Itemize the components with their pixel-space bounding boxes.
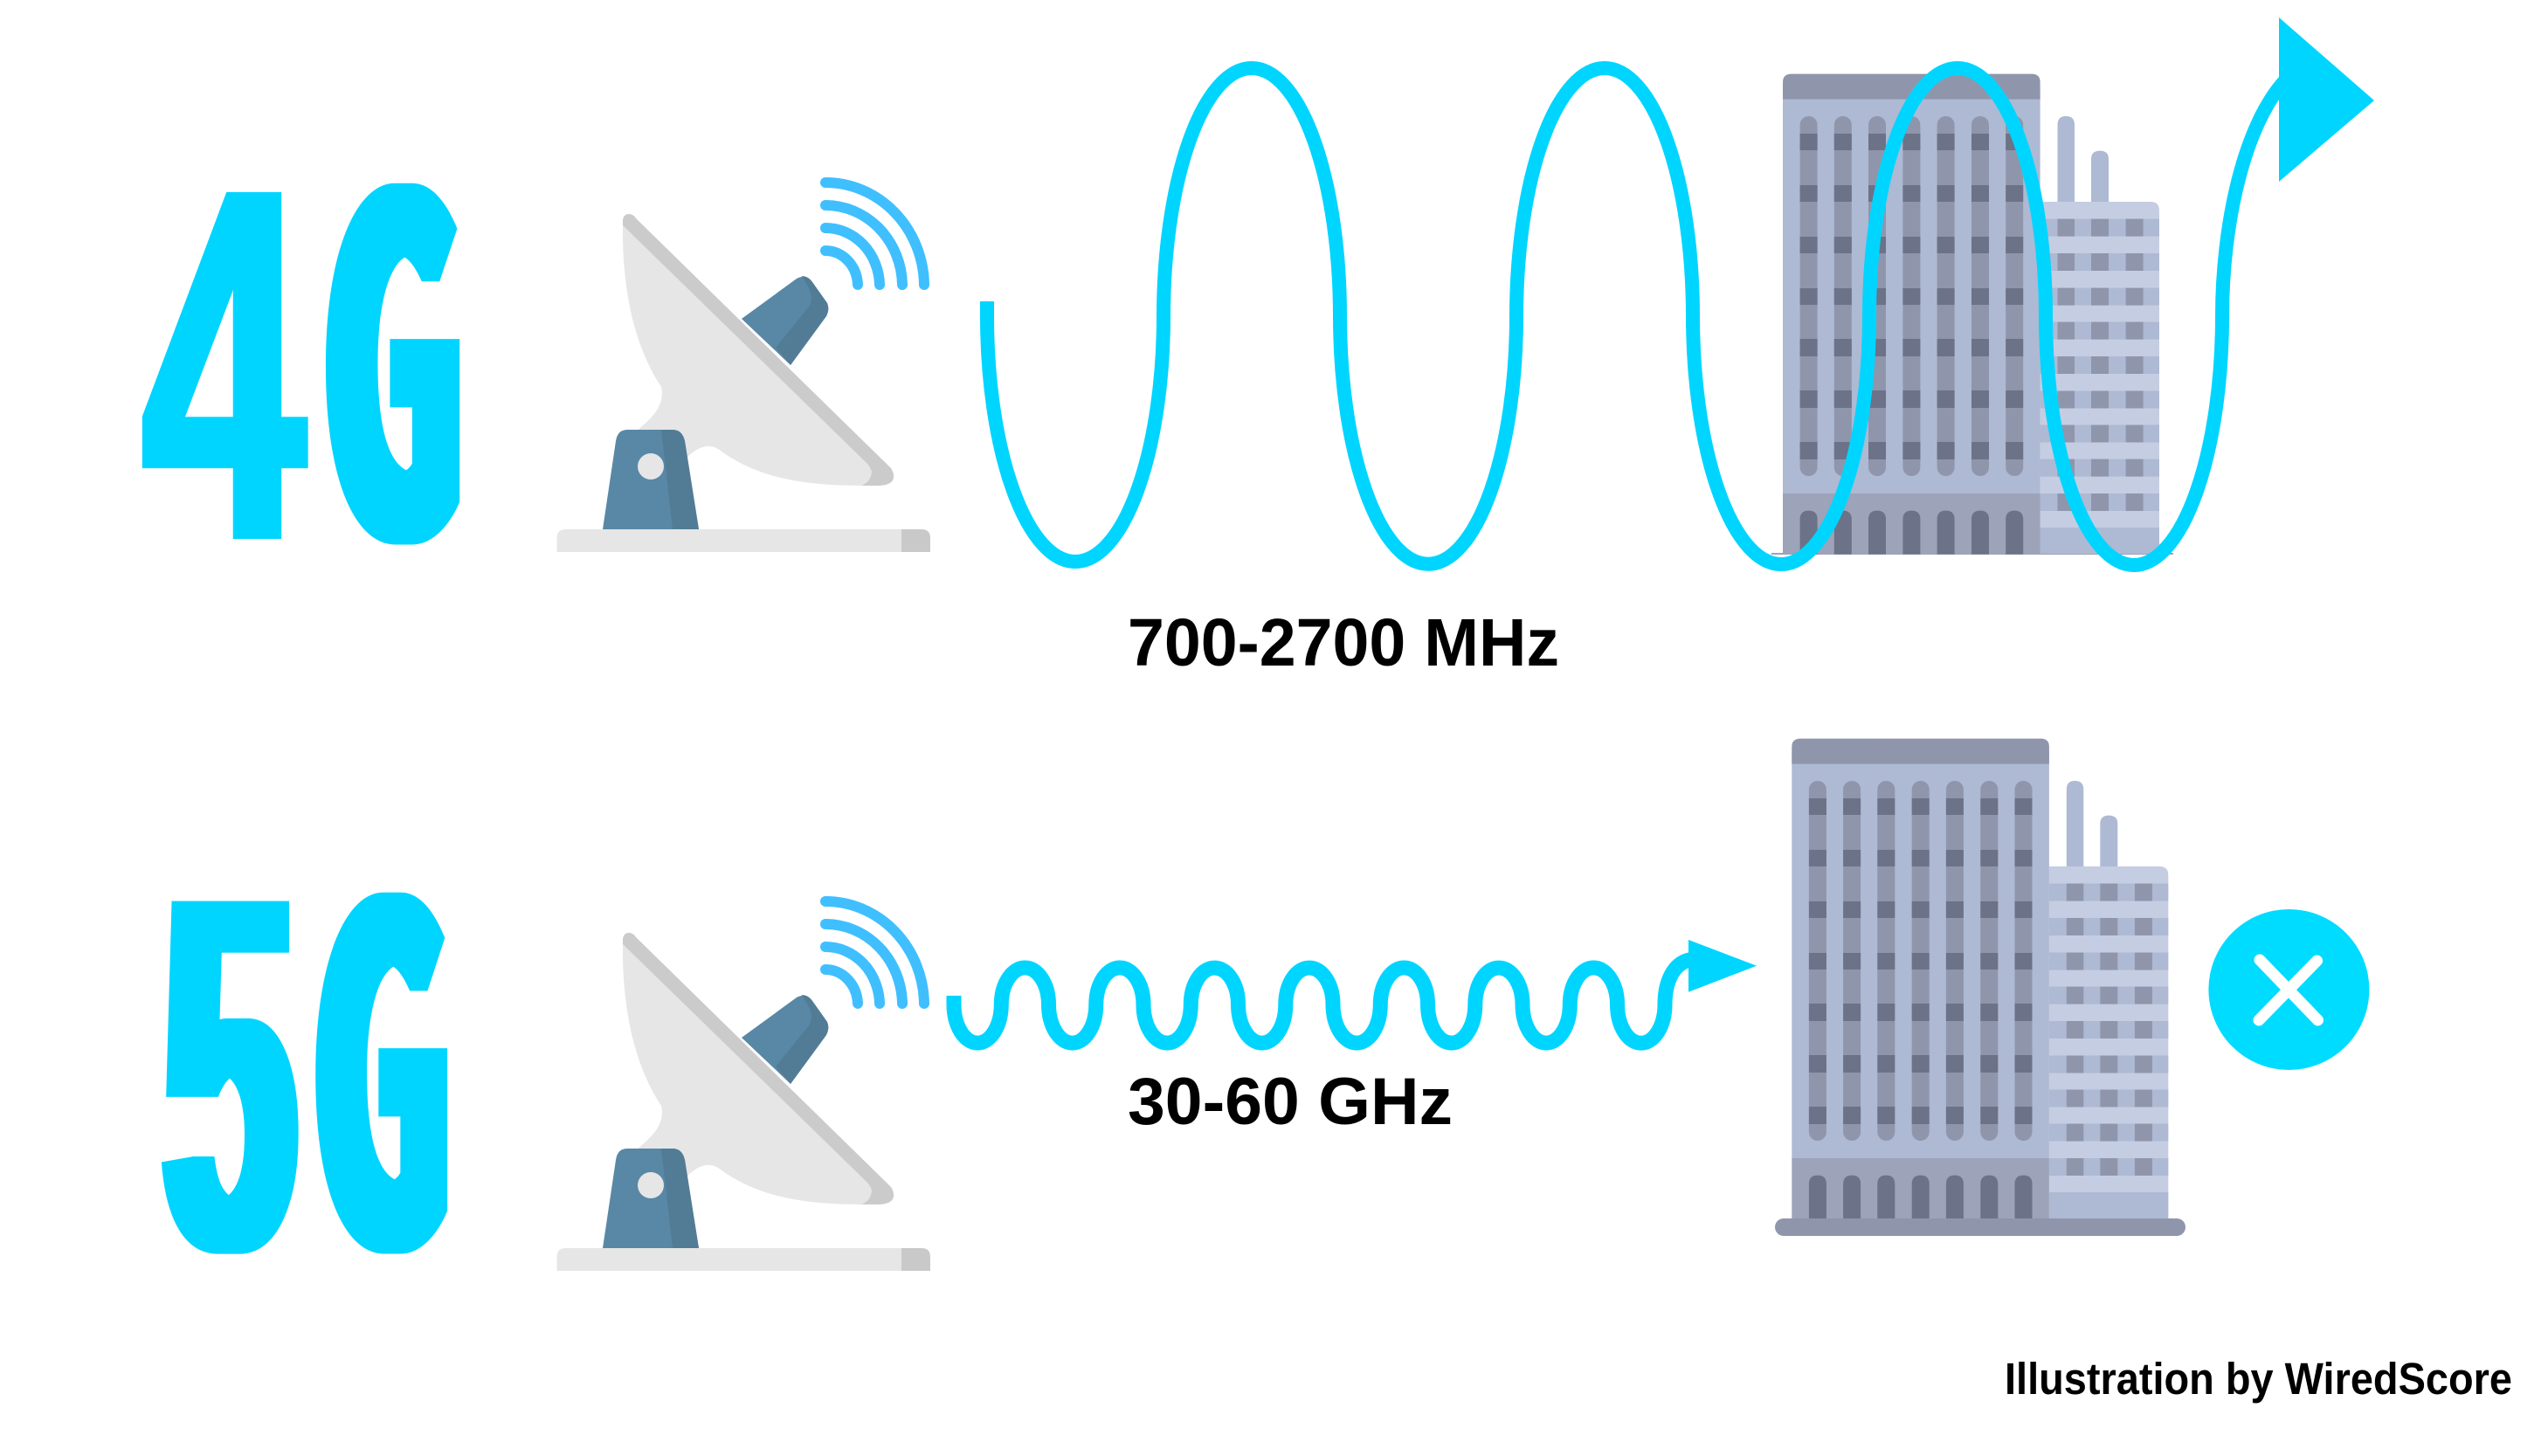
arrow: 5G wave arrowhead [1688, 940, 1757, 992]
heading: 5G [165, 705, 451, 1383]
icon: 5G satellite dish with signal arcs [557, 901, 930, 1271]
heading: 4G: 4 [143, 83, 307, 646]
chart: 5G short radio wave stopped by building [954, 940, 1757, 1043]
icon: building in 4G row [1771, 74, 2173, 555]
heading: 5G: 5 [165, 791, 294, 1356]
heading: 5G: G [314, 705, 451, 1383]
arrow: 4G wave arrowhead [2279, 17, 2374, 182]
credit line: Illustration by WiredScore [2005, 1354, 2512, 1404]
heading: 4G [143, 0, 463, 673]
icon: 4G satellite dish with signal arcs [557, 183, 930, 552]
icon: building in 5G row [1775, 739, 2185, 1236]
label: 5G frequency: 30-60 GHz [1128, 1065, 1453, 1139]
label: 4G frequency: 700-2700 MHz [1128, 605, 1559, 680]
chart: 4G long radio wave passing through building [987, 17, 2374, 565]
icon: blocked cross badge [2208, 909, 2369, 1070]
heading: 4G: G [325, 0, 463, 673]
